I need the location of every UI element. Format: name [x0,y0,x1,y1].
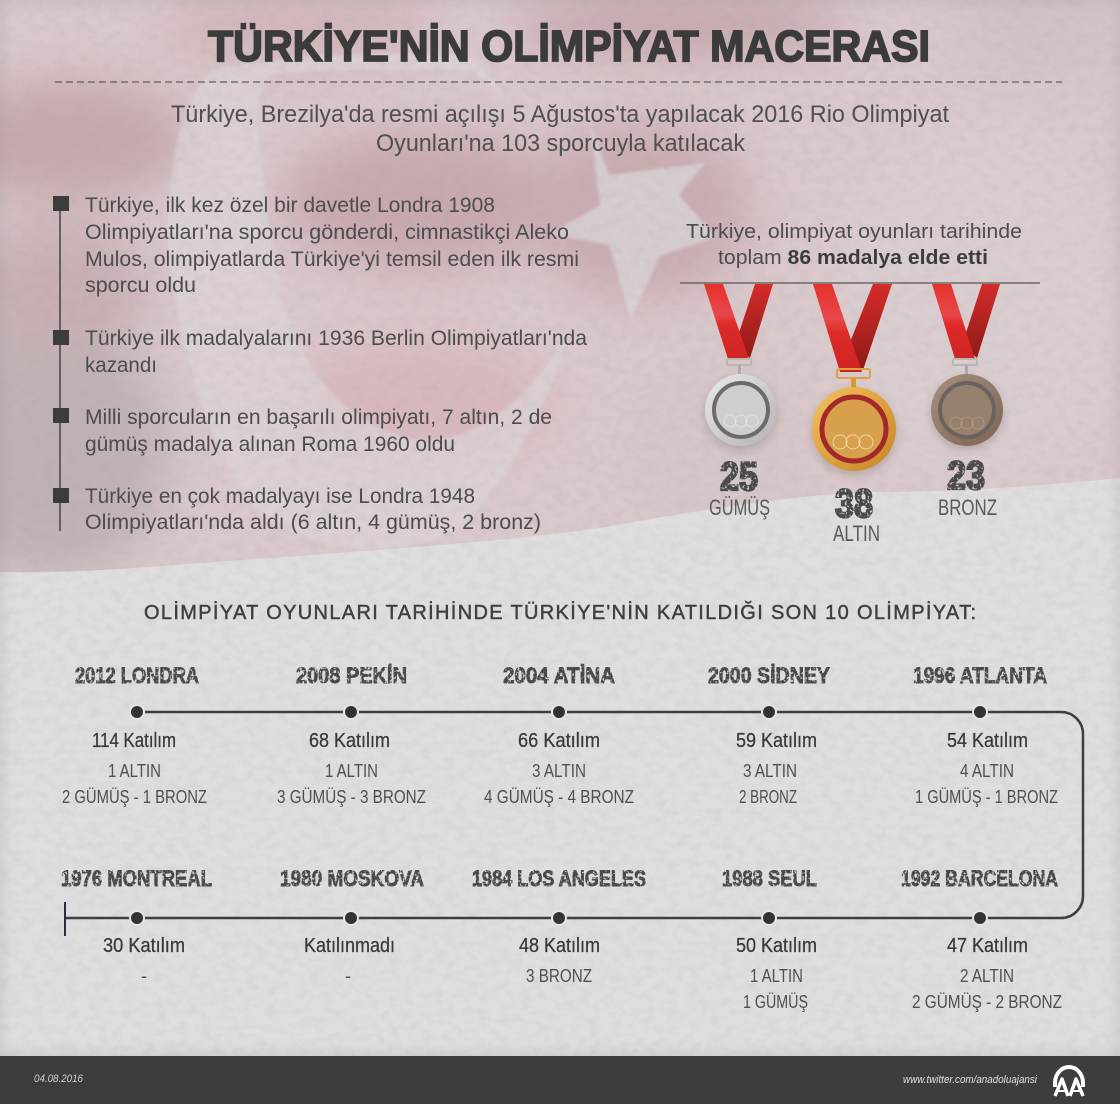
olympics 2008 Pekin: 3 GÜMÜŞ - 3 BRONZ [277,787,426,807]
fact 1 [53,194,579,297]
olympics 1976 Montreal: - [141,966,147,986]
medal counts: BRONZ [938,495,997,520]
olympics 1996 Atlanta: 1996 ATLANTA [913,663,1047,688]
olympics 2012 Londra: 1 ALTIN [108,761,161,781]
olympics 1988 Seul: 1 GÜMÜŞ [743,992,808,1012]
olympics 2004 Atina: 66 Katılım [518,730,600,752]
olympics 1984 Los Angeles: 3 BRONZ [526,966,592,986]
olympics 1976 Montreal: 30 Katılım [103,935,185,957]
medal total heading: toplam 86 madalya elde etti [718,247,988,269]
olympics 1996 Atlanta [913,663,1058,807]
fact 2: kazandı [85,354,157,377]
olympics 1992 Barcelona [901,866,1062,1012]
medal: gold [812,284,896,475]
footer: www.twitter.com/anadoluajansi [903,1074,1037,1086]
medal counts: 23 [947,454,985,498]
olympics 2004 Atina: 2004 ATİNA [503,663,615,688]
olympics 1980 Moskova: Katılınmadı [304,935,395,957]
olympics 2000 Sidney: 59 Katılım [736,730,817,752]
olympics 1992 Barcelona: 1992 BARCELONA [901,866,1058,891]
olympics 1976 Montreal [61,866,212,986]
olympics 1992 Barcelona: 47 Katılım [947,935,1028,957]
fact 1: Türkiye, ilk kez özel bir davetle Londra 1908 [85,194,495,217]
olympics 1976 Montreal: 1976 MONTREAL [61,866,212,891]
subtitle [171,101,949,157]
footer: 04.08.2016 [34,1073,84,1085]
medal counts [709,454,997,546]
subtitle: Oyunları'na 103 sporcuyla katılacak [376,130,746,157]
olympics 2012 Londra [62,663,207,807]
olympics 2012 Londra: 2 GÜMÜŞ - 1 BRONZ [62,787,207,807]
fact 3: gümüş madalya alınan Roma 1960 oldu [85,433,455,456]
olympics 2000 Sidney: 3 ALTIN [743,761,797,781]
medal counts: ALTIN [833,521,880,546]
olympics 2012 Londra: 2012 LONDRA [75,663,199,688]
medal: bronze [931,284,1003,450]
panel: key facts list [53,194,587,534]
fact 4 [53,485,541,534]
fact 2: Türkiye ilk madalyalarını 1936 Berlin Olimpiyatları'nda [85,327,587,350]
olympics 1988 Seul [722,866,817,1012]
medal counts: 38 [835,482,873,526]
fact 3: Milli sporcuların en başarılı olimpiyatı, 7 altın, 2 de [85,406,552,429]
olympics 2012 Londra: 114 Katılım [92,730,176,752]
fact 4: Türkiye en çok madalyayı ise Londra 1948 [85,485,475,508]
olympics 1984 Los Angeles [472,866,646,986]
section heading: OLİMPİYAT OYUNLARI TARİHİNDE TÜRKİYE'NİN KATILDIĞI SON 10 OLİMPİYAT: [144,601,976,624]
olympics 2004 Atina: 4 GÜMÜŞ - 4 BRONZ [484,787,634,807]
fact 1: sporcu oldu [85,274,196,297]
subtitle: Türkiye, Brezilya'da resmi açılışı 5 Ağustos'ta yapılacak 2016 Rio Olimpiyat [171,101,949,128]
fact 4: Olimpiyatları'nda aldı (6 altın, 4 gümüş, 2 bronz) [85,511,541,534]
olympics 1992 Barcelona: 2 ALTIN [960,966,1014,986]
olympics 1996 Atlanta: 4 ALTIN [960,761,1014,781]
medal rail [680,282,1040,284]
olympics 1980 Moskova [280,866,424,986]
olympics 2008 Pekin: 2008 PEKİN [296,663,407,688]
medal total heading: Türkiye, olimpiyat oyunları tarihinde [686,221,1022,243]
dashed divider line [55,81,1062,83]
olympics 1988 Seul: 1988 SEUL [722,866,817,891]
timeline dots [130,705,987,925]
olympics 2000 Sidney: 2 BRONZ [739,787,797,807]
olympics 1984 Los Angeles: 48 Katılım [519,935,600,957]
medal: silver [704,284,777,450]
fact 2 [53,327,587,377]
olympics 2008 Pekin: 68 Katılım [309,730,390,752]
medal counts: GÜMÜŞ [709,495,770,520]
olympics 1980 Moskova: 1980 MOSKOVA [280,866,424,891]
icon: AA logo [1055,1067,1083,1096]
olympics 1980 Moskova: - [345,966,351,986]
olympics 1988 Seul: 50 Katılım [736,935,817,957]
timeline line [65,712,1083,918]
olympics 1996 Atlanta: 1 GÜMÜŞ - 1 BRONZ [915,787,1058,807]
olympics 2008 Pekin: 1 ALTIN [325,761,378,781]
olympics 2000 Sidney [708,663,830,807]
timeline end tick [64,902,66,936]
medal counts: 25 [720,455,758,499]
footer [0,1056,1120,1104]
olympics 1988 Seul: 1 ALTIN [750,966,803,986]
olympics 1992 Barcelona: 2 GÜMÜŞ - 2 BRONZ [912,992,1062,1012]
fact 1: Mulos, olimpiyatlarda Türkiye'yi temsil eden ilk resmi [85,248,579,271]
olympics 2000 Sidney: 2000 SİDNEY [708,663,830,688]
olympics 2004 Atina [484,663,634,807]
fact 1: Olimpiyatları'na sporcu gönderdi, cimnastikçi Aleko [85,221,569,244]
fact 3 [53,406,552,456]
olympics 2008 Pekin [277,663,426,807]
olympics 2004 Atina: 3 ALTIN [532,761,586,781]
medal total heading [686,221,1022,269]
olympics 1984 Los Angeles: 1984 LOS ANGELES [472,866,646,891]
olympics 1996 Atlanta: 54 Katılım [947,730,1028,752]
title: TÜRKİYE'NİN OLİMPİYAT MACERASI [208,22,930,71]
